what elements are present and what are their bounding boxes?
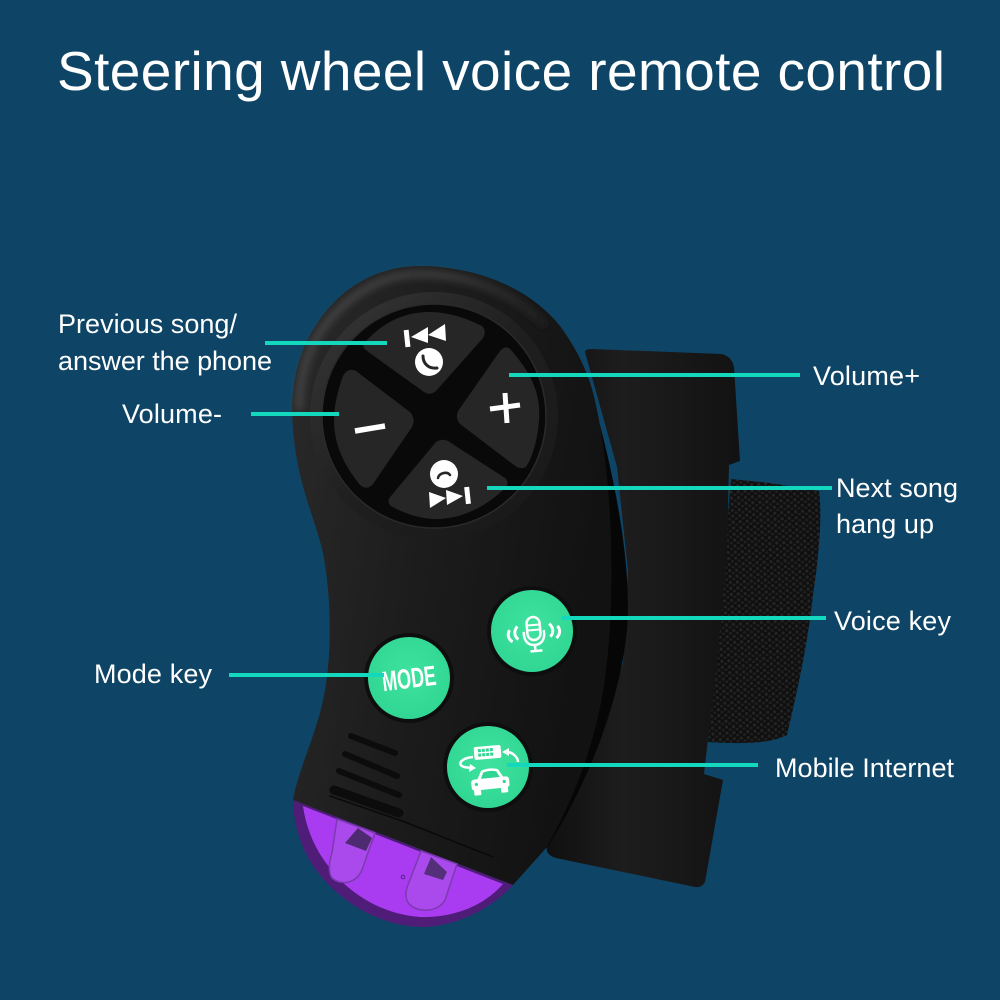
vent grooves (330, 736, 493, 857)
callout: next song (487, 473, 958, 539)
icon: answer phone (415, 348, 443, 376)
icon: microphone (507, 615, 561, 653)
remote control device (292, 266, 820, 927)
callout: voice key: Voice key (834, 606, 952, 636)
mode key (364, 633, 454, 723)
icon: previous track (404, 324, 446, 347)
callout: volume plus (509, 361, 920, 391)
callout: volume plus: Volume+ (813, 361, 920, 391)
purple lens (293, 800, 513, 927)
elastic strap (708, 479, 820, 743)
button: next / hang up (388, 440, 508, 519)
mounting clip (547, 349, 740, 887)
callout: next song: hang up (836, 509, 934, 539)
callout: previous song (58, 309, 387, 376)
callout: mobile internet: Mobile Internet (775, 753, 954, 783)
icon: minus (355, 426, 385, 431)
icon: phone and car (460, 745, 518, 796)
clip gap (530, 425, 628, 852)
button: previous / answer (363, 312, 485, 394)
callout: mode key (94, 659, 384, 689)
button: volume plus (457, 347, 539, 468)
lens tube left (329, 819, 375, 883)
callout: volume minus: Volume- (122, 399, 222, 429)
button: volume minus (334, 370, 414, 488)
icon: next track (429, 487, 471, 508)
callout: next song: Next song (836, 473, 958, 503)
mode label: MODE (380, 660, 438, 697)
icon: plus (490, 393, 520, 423)
title: Steering wheel voice remote control (57, 40, 945, 102)
raised rim around d-pad (310, 292, 558, 540)
callout: volume minus (122, 399, 339, 429)
lens tube right (406, 851, 457, 910)
callout: mobile internet (507, 753, 954, 783)
voice key (487, 586, 577, 676)
main body (292, 266, 612, 885)
callout: voice key (562, 606, 952, 636)
mobile internet key (443, 722, 533, 812)
icon: hang up (430, 460, 458, 488)
body highlight (299, 274, 545, 410)
callout: mode key: Mode key (94, 659, 212, 689)
d-pad well (322, 304, 546, 528)
callout: previous song: answer the phone (58, 346, 272, 376)
callout: previous song: Previous song/ (58, 309, 237, 339)
